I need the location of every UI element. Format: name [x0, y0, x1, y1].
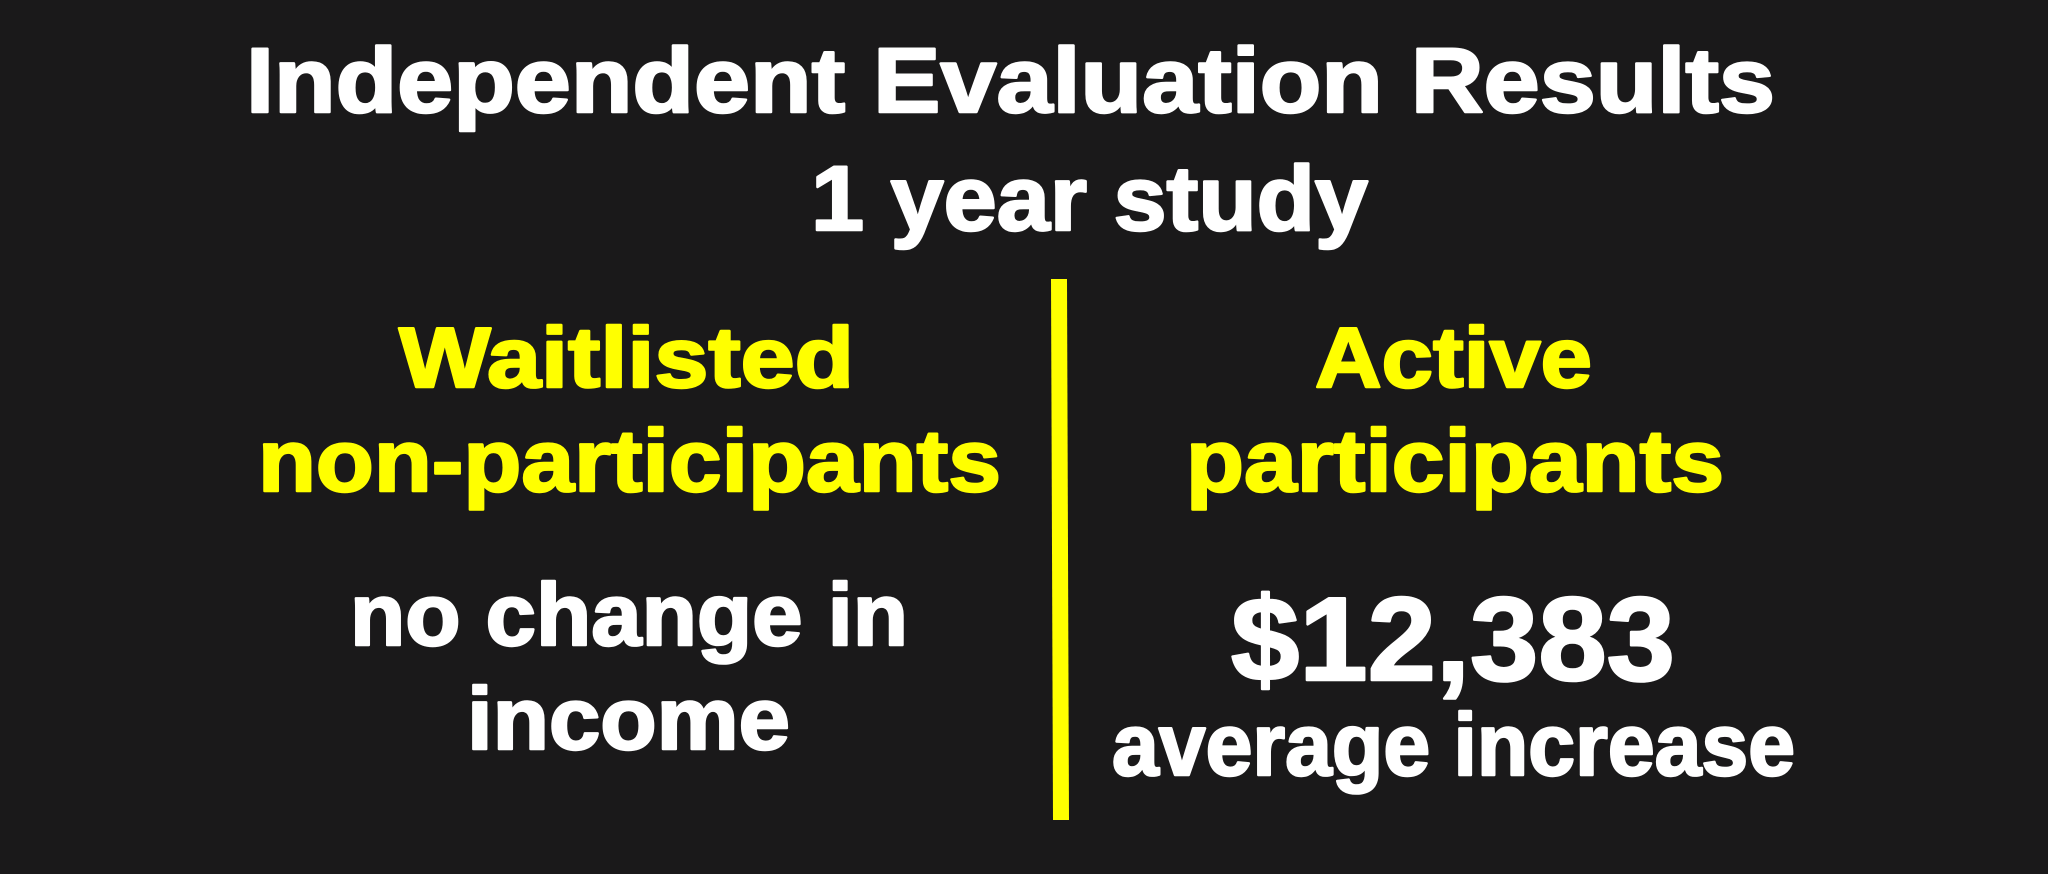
heading: active: participants — [1186, 411, 1724, 510]
result: no change in income: no change in — [350, 565, 908, 664]
heading: active: Active — [1315, 311, 1592, 406]
panel: waitlisted non-participants — [258, 311, 1001, 768]
title: Independent Evaluation Results — [246, 30, 1775, 132]
result: average increase: $12,383 — [1231, 573, 1675, 706]
heading: active — [1186, 311, 1724, 510]
heading: waitlisted: Waitlisted — [399, 311, 854, 406]
heading: waitlisted — [258, 311, 1001, 510]
title — [246, 30, 1775, 250]
result: average increase: average increase — [1112, 695, 1795, 794]
panel: active participants — [1112, 311, 1795, 794]
heading: waitlisted: non-participants — [258, 411, 1001, 510]
result: no change in income — [350, 565, 908, 768]
result: no change in income: income — [467, 669, 790, 768]
vertical divider — [1051, 279, 1069, 820]
title: 1 year study — [811, 148, 1368, 250]
result: average increase — [1112, 573, 1795, 794]
